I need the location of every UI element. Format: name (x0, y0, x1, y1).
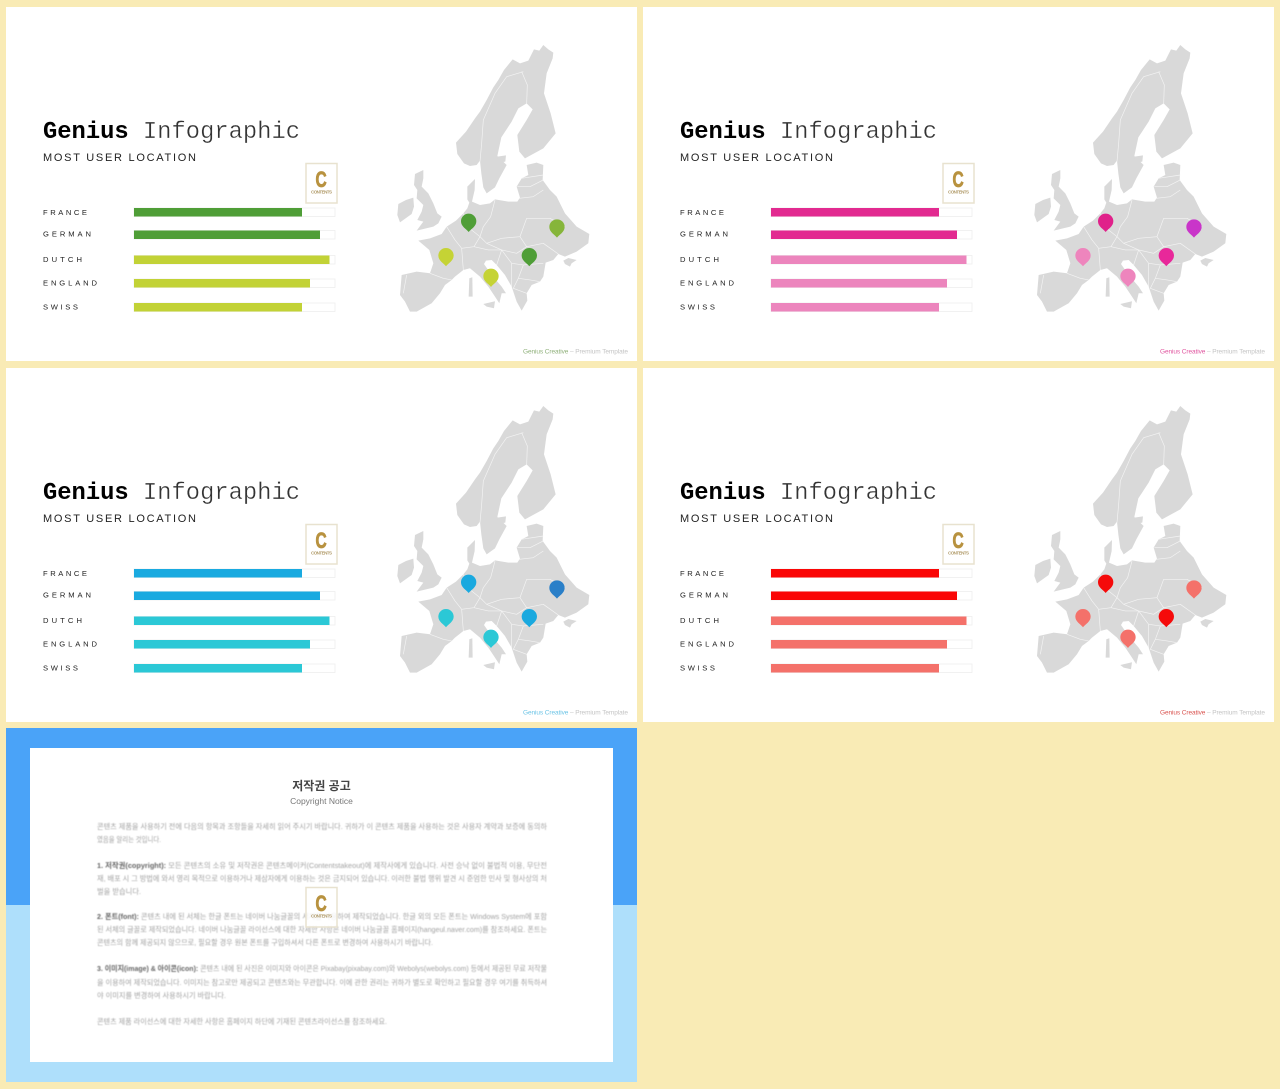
logo (306, 888, 337, 927)
logo (306, 524, 337, 564)
subheading: Copyright Notice (290, 796, 353, 806)
notice body text: 3. 이미지(image) & 아이콘(icon): 콘텐츠 내에 된 사진은 이미지와 아이콘은 Pixabay(pixabay.com)와 Webolys(webolys.com) 등에서 제공된 무료 저작물 (97, 963, 547, 973)
bar chart: SWISS (680, 664, 715, 672)
bar chart (680, 569, 972, 672)
map of Europe with pins (1034, 45, 1226, 312)
panel: green infographic (6, 7, 637, 361)
panel: magenta infographic (643, 7, 1274, 361)
bar chart: FRANCE (680, 208, 724, 217)
subtitle: MOST USER LOCATION (43, 513, 196, 525)
subtitle: MOST USER LOCATION (43, 152, 196, 164)
logo: CONTENTS (311, 550, 332, 556)
notice body text: 콘텐츠 제품 라이선스에 대한 자세한 사항은 홈페이지 하단에 기재된 콘텐츠라이선스를 참조하세요. (97, 1016, 387, 1026)
footer credit: Genius Creative – Premium Template (1160, 348, 1265, 356)
logo: C (952, 168, 964, 193)
bar chart: FRANCE (43, 208, 87, 217)
title: Genius Infographic (43, 480, 300, 507)
bar chart: GERMAN (43, 590, 91, 600)
title: Genius Infographic (680, 480, 937, 507)
logo (943, 524, 974, 564)
panel: red infographic (643, 368, 1274, 722)
notice body text: 을 이용하여 제작되었습니다. 이미지는 참고로만 제공되고 콘텐츠와는 무관합니다. 이에 관한 권리는 귀하가 별도로 확인하고 필요할 경우 여기를 취득하셔 (97, 977, 547, 987)
bar chart: ENGLAND (43, 640, 98, 648)
logo: CONTENTS (948, 550, 969, 556)
panel: copyright notice (6, 728, 637, 1082)
notice body text: 콘텐츠 제품을 사용하기 전에 다음의 항목과 조항들을 자세히 읽어 주시기 바랍니다. 귀하가 이 콘텐츠 제품을 사용하는 것은 사용자 계약과 보증에 동의하 (97, 821, 547, 831)
bar chart: ENGLAND (43, 278, 98, 288)
bar chart: ENGLAND (680, 278, 735, 288)
notice body text: 재, 배포 시 그 방법에 와서 영리 목적으로 이용하거나 제삼자에게 이용하는 것은 금지되어 있습니다. 이러한 불법 행위 발견 시 준엄한 민사 및 형사상의 처 (97, 873, 547, 883)
notice body text: 벌을 받습니다. (97, 886, 141, 896)
logo (306, 164, 337, 203)
bar chart: GERMAN (680, 230, 728, 238)
logo: C (316, 529, 327, 554)
bar chart: GERMAN (680, 590, 728, 600)
bar chart (680, 208, 972, 312)
map of Europe with pins (1034, 406, 1226, 673)
notice body text: 였음을 알리는 것입니다. (97, 834, 161, 844)
notice body text: 1. 저작권(copyright): 모든 콘텐츠의 소유 및 저작권은 콘텐츠메이커(Contentstakeout)에 제작사에게 있습니다. 사전 승낙 없이 불법적 이용, 무단전 (97, 860, 547, 870)
footer credit: Genius Creative – Premium Template (523, 710, 628, 716)
bar chart: SWISS (43, 302, 78, 312)
logo: C (952, 529, 964, 554)
title: Genius Infographic (43, 119, 300, 146)
bar chart: SWISS (680, 302, 715, 312)
logo: CONTENTS (311, 914, 332, 918)
notice body text: 2. 폰트(font): 콘텐츠 내에 된 서체는 한글 폰트는 네이버 나눔글꼴의 서체를 사용하여 제작되었습니다. 한글 외의 모든 폰트는 Windows System에 포함 (97, 911, 547, 921)
subtitle: MOST USER LOCATION (680, 513, 833, 525)
map of Europe with pins (397, 406, 589, 673)
bar chart: FRANCE (680, 569, 724, 578)
notice body text (97, 821, 547, 1026)
bar chart: ENGLAND (680, 640, 735, 648)
bar chart (43, 208, 335, 312)
logo: C (316, 892, 327, 917)
logo: CONTENTS (311, 190, 332, 194)
heading: copyright notice: 저작권 공고 (292, 778, 351, 793)
footer credit: Genius Creative – Premium Template (1160, 710, 1265, 716)
bar chart: DUTCH (43, 616, 82, 625)
bar chart: DUTCH (43, 255, 82, 264)
notice body text: 된 서체의 글꼴로 제작되었습니다. 네이버 나눔글꼴 라이선스에 대한 자세한 사항은 네이버 나눔글꼴 홈페이지(hangeul.naver.com)를 참조하세요. 폰트는 (97, 924, 547, 934)
bar chart: DUTCH (680, 255, 719, 264)
panel: blue infographic (6, 368, 637, 722)
notice body text: 콘텐츠의 함께 제공되지 않으므로, 필요할 경우 원본 폰트를 구입하셔서 다른 폰트로 변경하여 사용하시기 바랍니다. (97, 937, 433, 947)
map of Europe with pins (397, 45, 589, 312)
logo: CONTENTS (948, 190, 969, 194)
bar chart: FRANCE (43, 569, 87, 578)
title: Genius Infographic (680, 119, 937, 146)
logo (943, 164, 974, 203)
logo: C (316, 168, 327, 193)
bar chart (43, 569, 335, 672)
bar chart: GERMAN (43, 230, 91, 238)
notice body text: 야 이미지를 변경하여 사용하시기 바랍니다. (97, 990, 226, 1000)
bar chart: SWISS (43, 664, 78, 672)
bar chart: DUTCH (680, 616, 719, 625)
footer credit: Genius Creative – Premium Template (523, 348, 628, 356)
subtitle: MOST USER LOCATION (680, 152, 833, 164)
